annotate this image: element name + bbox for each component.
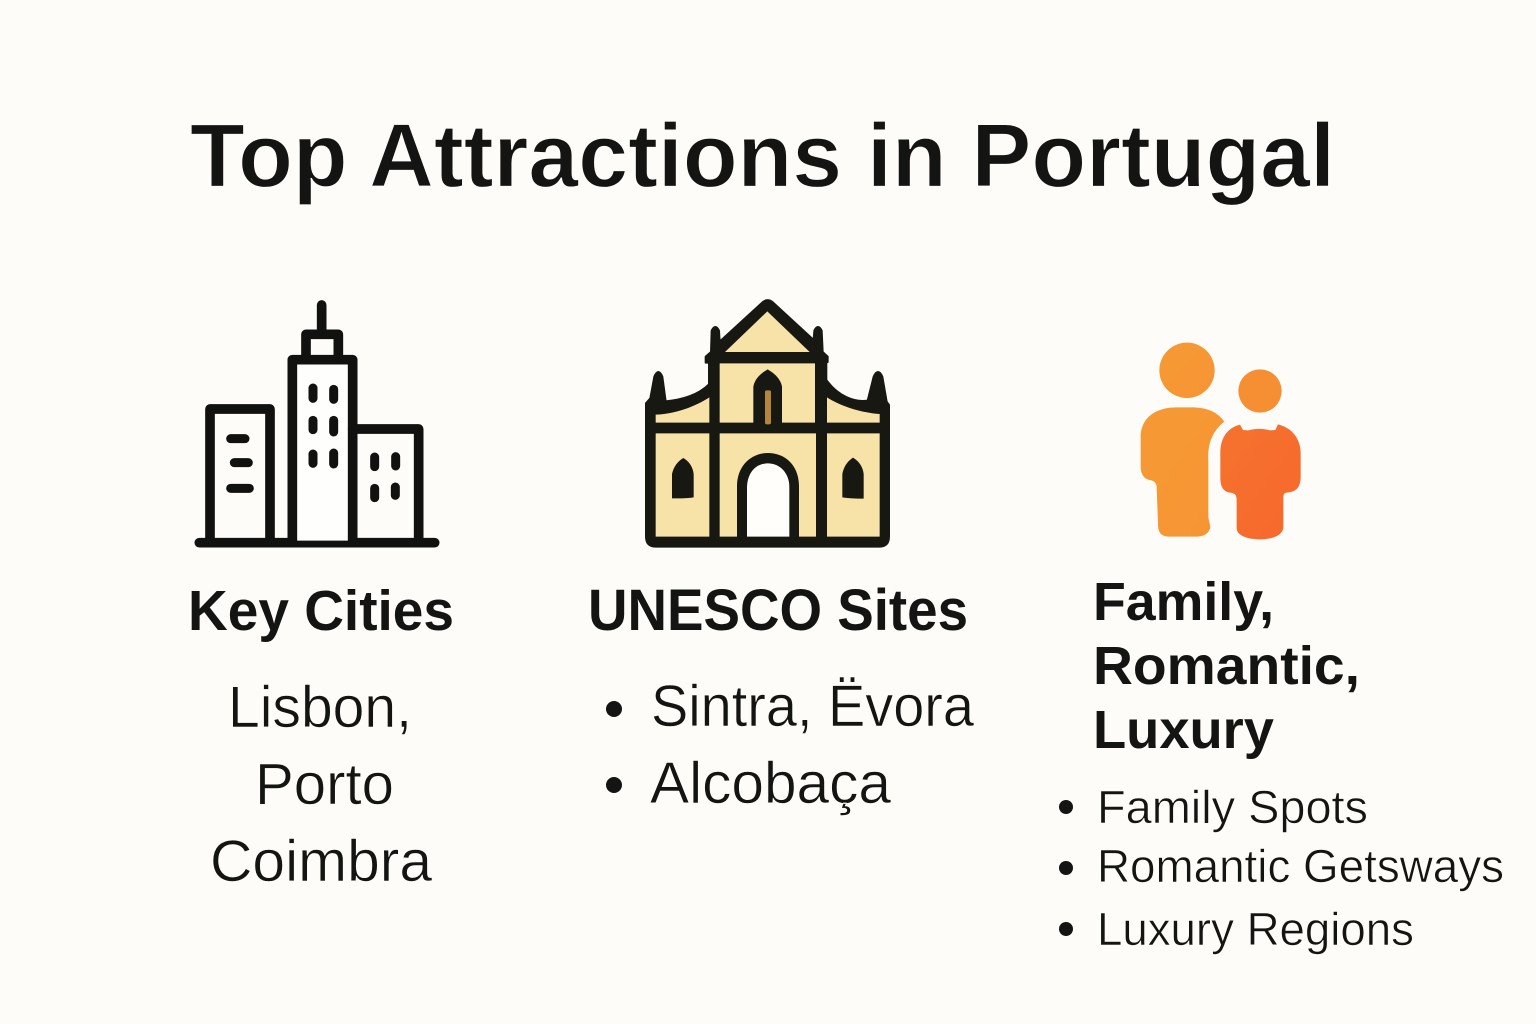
city list: Porto: [255, 752, 394, 817]
title: Top Attractions in Portugal: [190, 106, 1335, 206]
family list: Luxury Regions: [1097, 903, 1414, 955]
city list: [210, 675, 433, 894]
unesco list: Alcobaça: [650, 751, 892, 816]
family list: [1059, 781, 1504, 955]
panel: unesco sites: [588, 300, 975, 816]
city list: Lisbon,: [228, 675, 412, 740]
icon: historic church: [646, 300, 889, 547]
heading: family romantic luxury: Romantic,: [1093, 636, 1360, 696]
icon: city buildings: [199, 305, 435, 543]
city list: Coimbra: [210, 829, 433, 894]
panel: family romantic luxury: [1059, 343, 1504, 955]
icon: two people: [1141, 343, 1301, 539]
unesco list: [606, 674, 975, 816]
main arch doorway: [747, 463, 789, 537]
heading: unesco sites: UNESCO Sites: [588, 578, 968, 643]
family list: Family Spots: [1097, 781, 1368, 833]
panel: key cities: [188, 305, 454, 894]
heading: family romantic luxury: [1093, 572, 1360, 760]
unesco list: Sintra, Ëvora: [651, 674, 975, 739]
family list: Romantic Getsways: [1097, 840, 1504, 892]
heading: key cities: Key Cities: [188, 579, 454, 643]
side windows: [672, 458, 694, 498]
heading: family romantic luxury: Family,: [1093, 572, 1274, 632]
pediment: [725, 311, 810, 352]
window slit: [765, 390, 771, 424]
heading: family romantic luxury: Luxury: [1093, 700, 1274, 760]
